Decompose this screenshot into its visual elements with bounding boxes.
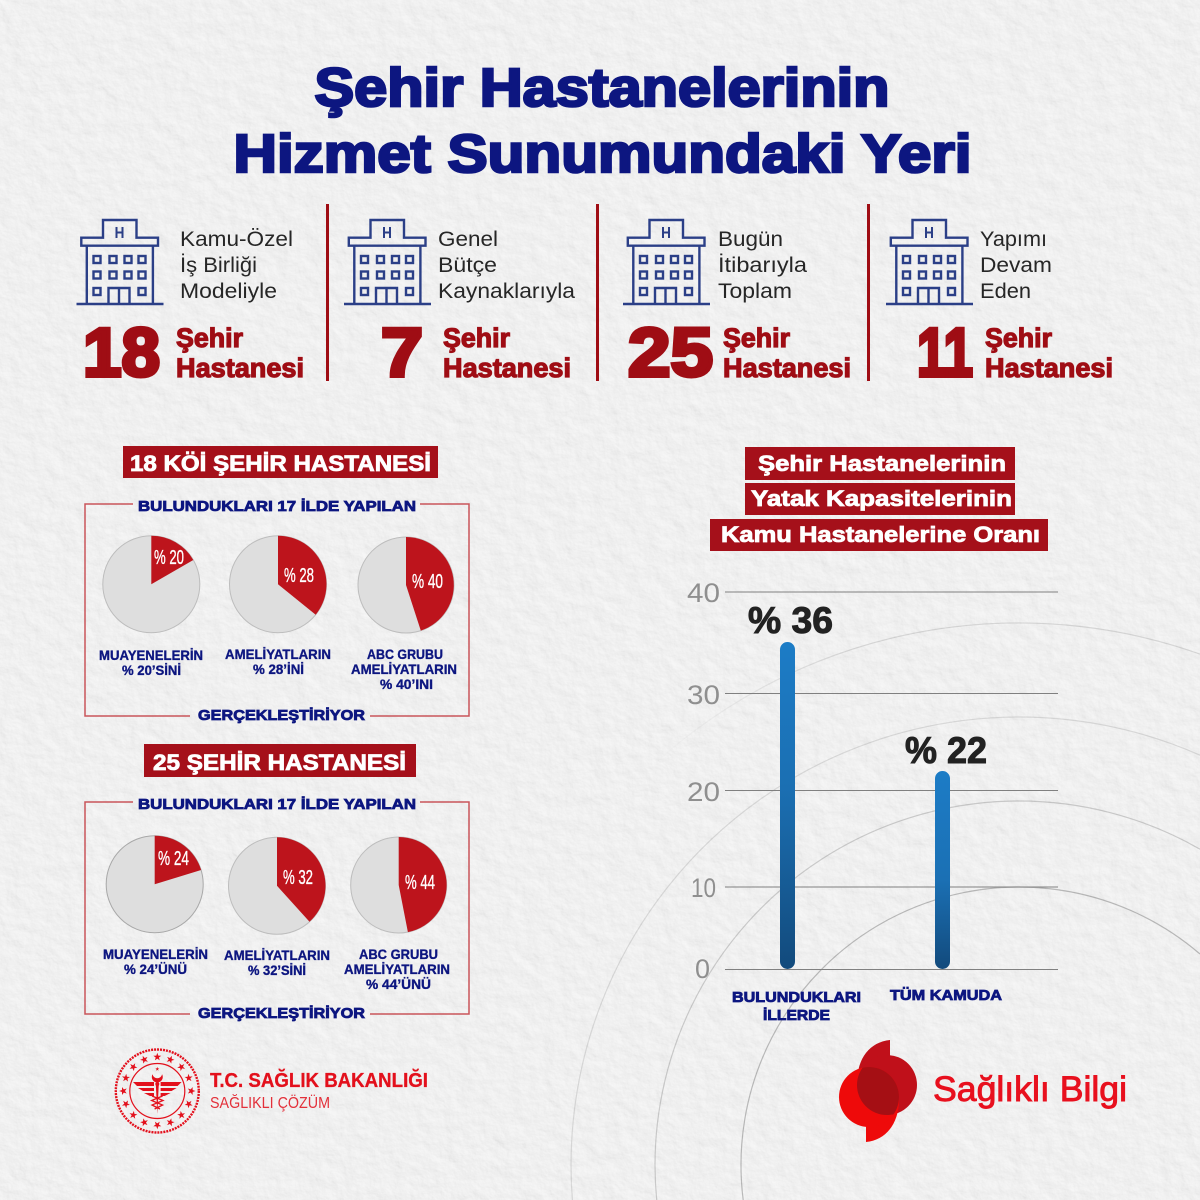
bar: bulundukları illerde: [780, 642, 795, 969]
pie chart: ameliyat 28: [230, 536, 326, 633]
pie chart: muayene 24: [106, 836, 203, 933]
stat unit: [985, 323, 1113, 383]
category label: bulundukları illerde: BULUNDUKLARI: [732, 989, 861, 1006]
pie label: ameliyat: % 32’SİNİ: [248, 962, 306, 978]
stat number: 25: [628, 314, 713, 391]
stat description: Yapımı: [980, 228, 1047, 251]
category label: bulundukları illerde: İLLERDE: [763, 1007, 830, 1024]
pie label: ameliyat: AMELİYATLARIN: [225, 646, 331, 662]
panel: stat Genel Bütçe 7: [344, 220, 575, 391]
stat unit: Şehir: [443, 323, 510, 353]
stat unit: Şehir: [985, 323, 1052, 353]
stat description: İş Birliği: [180, 254, 257, 277]
logo: T.C. Sağlık Bakanlığı: [116, 1050, 428, 1132]
pie label: ameliyat: % 28’İNİ: [253, 661, 304, 677]
pie label: muayene: % 24’ÜNÜ: [124, 961, 187, 977]
brand name: Sağlıklı Bilgi: [933, 1070, 1127, 1109]
bar chart: [687, 578, 1058, 1024]
value: 36: % 36: [748, 600, 833, 641]
pie label: muayene: % 20’SİNİ: [122, 662, 181, 678]
pie chart: ABC ameliyat 44: % 44: [405, 872, 435, 894]
frame bottom caption: GERÇEKLEŞTİRİYOR: [198, 1005, 365, 1022]
pie label: ABC: % 44’ÜNÜ: [366, 976, 431, 992]
heading: 18 KÖİ ŞEHİR HASTANESİ: [130, 451, 431, 476]
stat description: [718, 228, 807, 303]
stat unit: [443, 323, 571, 383]
pie label: ABC: ABC GRUBU: [367, 646, 443, 662]
frame top caption: BULUNDUKLARI 17 İLDE YAPILAN: [138, 498, 416, 515]
pie chart: ameliyat 32: % 32: [283, 867, 313, 889]
stat unit: Şehir: [176, 323, 243, 353]
pie label: muayene: MUAYENELERİN: [99, 647, 203, 663]
bar: tüm kamuda: [935, 771, 950, 969]
stat unit: [176, 323, 304, 383]
frame top caption: BULUNDUKLARI 17 İLDE YAPILAN: [138, 796, 416, 813]
chart heading: Yatak Kapasitelerinin: [751, 486, 1012, 511]
stat description: Toplam: [718, 280, 792, 303]
heading: 25 ŞEHİR HASTANESİ: [153, 750, 406, 775]
stat unit: Hastanesi: [985, 353, 1113, 383]
stat description: Bugün: [718, 228, 783, 251]
stat unit: Hastanesi: [443, 353, 571, 383]
ministry name: T.C. SAĞLIK BAKANLIĞI: [210, 1068, 428, 1092]
stat description: Kamu-Özel: [180, 228, 293, 251]
stat number: 11: [917, 314, 973, 391]
pie label: ABC: % 40’INI: [380, 676, 433, 692]
pie label: ABC: [344, 946, 450, 992]
stat unit: Şehir: [723, 323, 790, 353]
pie chart: ABC ameliyat 40: % 40: [412, 571, 443, 593]
pie chart: ABC ameliyat 40: [358, 537, 454, 633]
category label: bulundukları illerde: [732, 989, 861, 1024]
y axis labels: 0: [695, 954, 710, 984]
stat description: Genel: [438, 228, 498, 251]
logo: Sağlıklı Bilgi: [839, 1040, 1127, 1142]
pie label: ameliyat: [225, 646, 331, 677]
heading: [123, 446, 438, 478]
stat description: Modeliyle: [180, 280, 277, 303]
ministry name: [210, 1068, 428, 1112]
stat description: Bütçe: [438, 254, 497, 277]
pie label: ABC: AMELİYATLARIN: [351, 661, 457, 677]
stat unit: Hastanesi: [176, 353, 304, 383]
panel: 25 Şehir Hastanesi: [85, 744, 469, 1022]
value: 22: % 22: [905, 730, 987, 771]
panel: stat Kamu-Özel 18: [76, 220, 304, 391]
pie label: ABC: ABC GRUBU: [359, 946, 438, 962]
stat description: [180, 228, 293, 303]
title: Hizmet Sunumundaki Yeri: [234, 124, 972, 184]
chart heading: [710, 447, 1048, 551]
chart heading: Şehir Hastanelerinin: [758, 451, 1006, 476]
pie label: muayene: MUAYENELERİN: [103, 946, 208, 962]
heading: [144, 744, 416, 777]
pie chart: muayene 20: % 20: [154, 547, 184, 569]
pie chart: ameliyat 28: % 28: [284, 565, 314, 587]
stat description: Eden: [980, 280, 1031, 303]
chart heading: Kamu Hastanelerine Oranı: [721, 522, 1040, 547]
pie chart: ameliyat 32: [228, 837, 326, 934]
frame bottom caption: GERÇEKLEŞTİRİYOR: [198, 707, 365, 724]
pie chart: muayene 20: [103, 536, 200, 633]
stat unit: Hastanesi: [723, 353, 851, 383]
stat description: Kaynaklarıyla: [438, 280, 575, 303]
panel: stat Yapımı Devam Eden 11: [886, 220, 1113, 391]
pie label: ameliyat: [224, 947, 330, 978]
y axis labels: 30: [687, 680, 720, 710]
y axis labels: 20: [687, 777, 720, 807]
stat description: Devam: [980, 254, 1052, 277]
icon: ministry emblem: [116, 1050, 199, 1132]
pie chart: ABC ameliyat 44: [351, 837, 447, 933]
ministry name: SAĞLIKLI ÇÖZÜM: [210, 1093, 330, 1112]
category label: tüm kamuda: TÜM KAMUDA: [890, 987, 1002, 1004]
stat description: İtibarıyla: [718, 254, 807, 277]
pie label: ABC: AMELİYATLARIN: [344, 961, 450, 977]
icon: hospital building: [344, 220, 431, 304]
stat unit: [723, 323, 851, 383]
pie label: ABC: [351, 646, 457, 692]
icon: hospital building: [886, 220, 973, 304]
y axis labels: 10: [691, 873, 716, 903]
pie chart: muayene 24: % 24: [158, 848, 189, 870]
stat number: 7: [381, 314, 423, 391]
pie label: muayene: [103, 946, 208, 977]
stat description: [438, 228, 575, 303]
y axis labels: [687, 578, 720, 984]
panel: stat Bugün Toplam 25: [623, 220, 851, 391]
pie label: ameliyat: AMELİYATLARIN: [224, 947, 330, 963]
icon: hospital building: [623, 220, 710, 304]
panel: 18 KÖİ Şehir Hastanesi: [85, 446, 469, 724]
icon: Sağlıklı Bilgi mark: [839, 1040, 917, 1142]
title: Şehir Hastanelerinin: [314, 58, 890, 118]
title: [234, 58, 972, 184]
icon: hospital building: [76, 220, 164, 304]
y axis labels: 40: [687, 578, 720, 608]
stat description: [980, 228, 1052, 303]
stat number: 18: [83, 314, 160, 391]
pie label: muayene: [99, 647, 203, 678]
